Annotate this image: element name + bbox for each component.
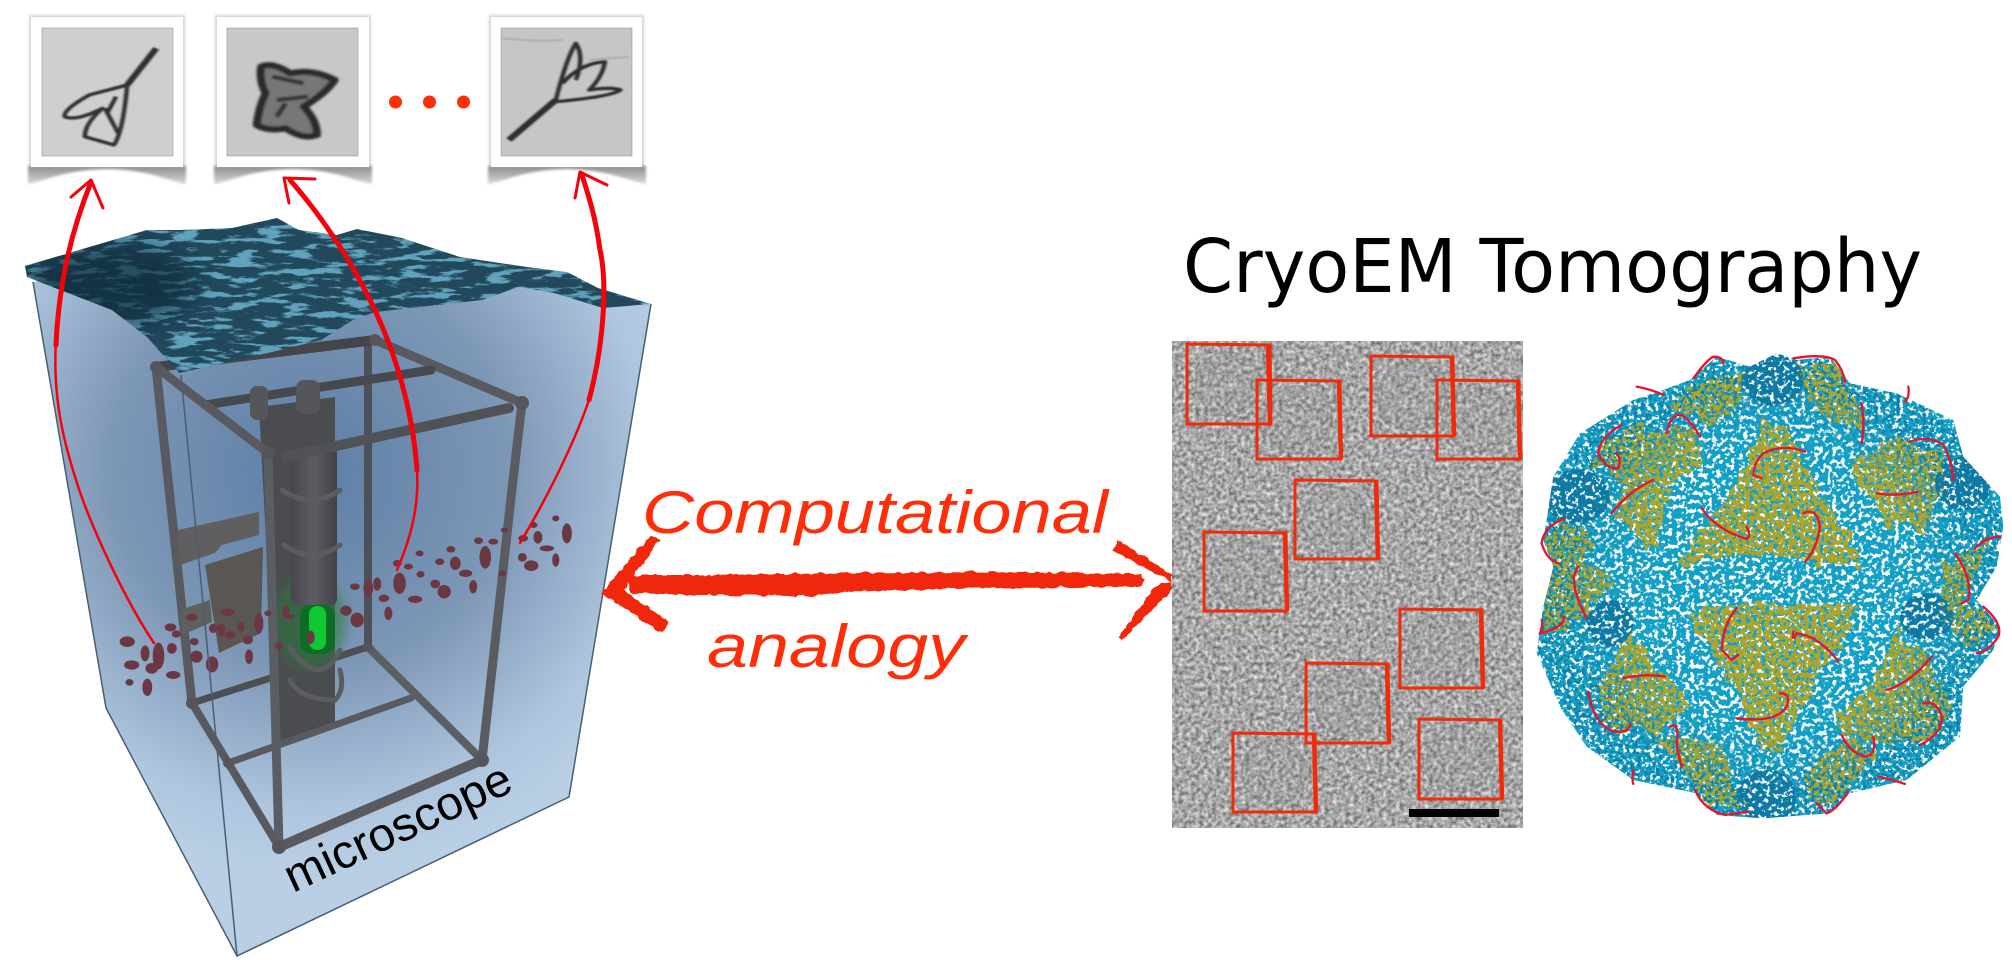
ellipsis dots <box>389 96 470 108</box>
red arrow to card 1 <box>55 180 154 643</box>
word: Computational: Computational <box>642 479 1110 546</box>
card 3 <box>488 15 646 184</box>
tank edge lines <box>33 282 651 956</box>
central instrument plates <box>178 380 335 747</box>
dark rim patches <box>1543 353 1992 823</box>
panel: plankton photo cards <box>28 15 646 184</box>
card 2 <box>214 15 372 184</box>
red arrow to card 2 <box>284 178 417 570</box>
frame joints <box>150 334 529 854</box>
red selection boxes <box>1187 344 1520 812</box>
scale bar <box>1409 809 1499 817</box>
red arrow to card 3 <box>520 172 607 543</box>
red loop segments <box>1540 356 2000 815</box>
word: analogy: analogy <box>707 613 970 680</box>
dark rim density <box>1530 347 2010 827</box>
panel: cryoEM micrograph <box>1172 341 1523 828</box>
virus capsid model <box>1530 340 2012 840</box>
panel: ocean tank <box>20 215 660 956</box>
green glow and tube <box>274 574 346 670</box>
microscope label: microscope <box>275 751 520 902</box>
cyan protein shell <box>1530 340 2012 840</box>
micrograph noise background <box>1172 341 1523 828</box>
brush arrow <box>601 534 1172 640</box>
card 1 <box>28 15 186 184</box>
title: CryoEM Tomography <box>1183 224 1922 310</box>
plankton swarm <box>120 515 572 696</box>
microscope frame <box>150 334 529 854</box>
tank water body <box>33 262 651 956</box>
double-headed arrow: computational analogy <box>601 479 1172 680</box>
ocean surface <box>20 215 660 380</box>
particle rings <box>1196 352 1510 804</box>
yellow protein subunits <box>1543 363 1997 807</box>
cylindrical column <box>291 447 337 605</box>
